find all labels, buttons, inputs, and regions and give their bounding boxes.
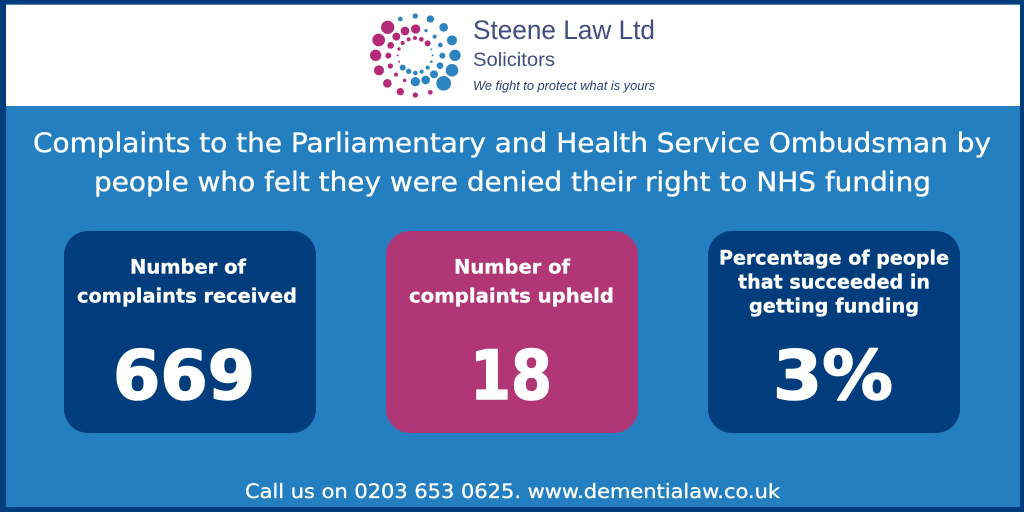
logo wordmark: Steene Law Ltd [473, 15, 655, 45]
card label [409, 256, 614, 308]
icon: Steene Law circular dot logo [370, 13, 461, 98]
title: people who felt they were denied their right to NHS funding [94, 167, 931, 198]
logo subtitle: Solicitors [473, 50, 555, 71]
panel: complaints received [64, 231, 316, 433]
footer contact line: Call us on 0203 653 0625. www.dementialaw.co.uk [245, 480, 781, 503]
card label: complaints upheld [409, 284, 614, 308]
card label: complaints received [77, 284, 297, 308]
stat: 3%: 3% [773, 337, 893, 416]
card label: getting funding [749, 294, 919, 318]
panel: logo header [6, 5, 1020, 106]
card label: Number of [130, 256, 247, 278]
card label [719, 246, 949, 318]
card label: that succeeded in [738, 270, 930, 294]
title [33, 128, 991, 198]
card label: Percentage of people [719, 246, 949, 270]
panel: complaints upheld [386, 231, 638, 433]
card label: Number of [454, 256, 571, 278]
logo tagline: We fight to protect what is yours [473, 79, 655, 93]
stat: 18: 18 [470, 337, 552, 416]
panel: percentage succeeded [708, 231, 960, 433]
title: Complaints to the Parliamentary and Health Service Ombudsman by [33, 128, 991, 159]
stat: 669: 669 [113, 337, 255, 416]
card label [77, 256, 297, 308]
